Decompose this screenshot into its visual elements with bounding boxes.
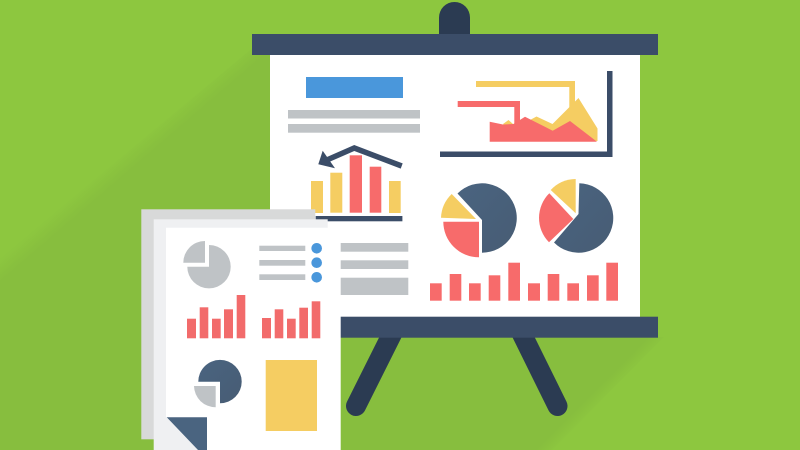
bottom bar chart — [430, 263, 618, 301]
pie chart left — [441, 183, 517, 257]
small bar chart with arrow — [311, 148, 402, 221]
blue title block — [306, 77, 403, 98]
grey text lines — [288, 110, 420, 133]
paper bar chart left — [187, 295, 245, 338]
screen top bar — [252, 34, 658, 55]
list lines — [259, 246, 305, 280]
easel top knob — [439, 2, 470, 34]
screen bottom bar — [252, 317, 658, 338]
paper bar chart right — [262, 301, 320, 338]
presentation screen — [270, 55, 640, 317]
front sheet — [166, 228, 341, 450]
paper dark pie chart — [194, 360, 242, 407]
grey pie chart — [183, 241, 231, 288]
yellow block — [266, 360, 317, 431]
area chart — [440, 71, 612, 157]
paper stack — [141, 209, 341, 450]
folded corner — [167, 417, 207, 450]
grey side blocks — [340, 243, 408, 295]
back sheet — [141, 209, 315, 439]
easel stand legs — [356, 330, 558, 406]
long shadow — [0, 40, 664, 450]
pie chart right — [539, 179, 613, 253]
list bullets — [311, 243, 322, 283]
middle sheet — [154, 219, 328, 450]
